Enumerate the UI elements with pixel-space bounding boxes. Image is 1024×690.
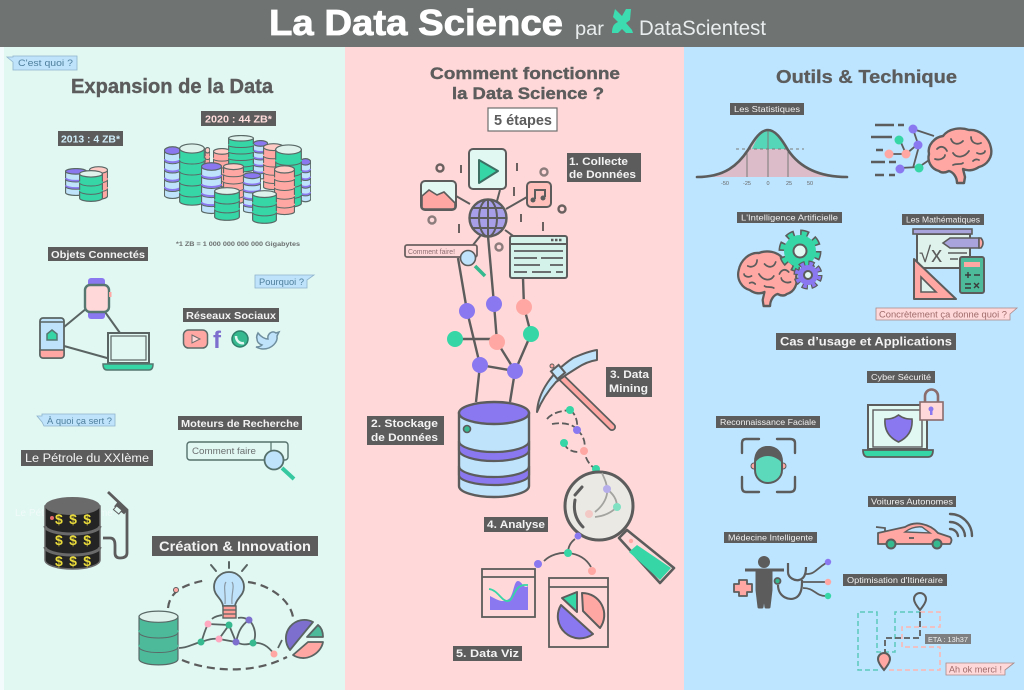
icon: magnifying glass <box>565 472 674 583</box>
chart: area chart <box>482 569 535 617</box>
label: Le Pétrole du XXIème <box>21 450 153 466</box>
bubble: Pourquoi: Pourquoi ? <box>259 277 304 288</box>
header band <box>0 0 1024 47</box>
byline: par: par <box>575 19 605 40</box>
label: Reconnaissance Faciale: Reconnaissance Faciale <box>720 417 816 427</box>
panel: Comment fonctionne la Data Science <box>367 64 674 661</box>
icon: search box: Comment faire <box>192 446 256 457</box>
label: Moteurs de Recherche: Moteurs de Recherche <box>181 418 299 430</box>
panel: Expansion de la Data <box>7 56 323 669</box>
icon: pickaxe <box>537 350 612 427</box>
icon: oil barrel: $ $ $ <box>55 553 91 569</box>
step 5 label: 5. Data Viz <box>456 648 520 660</box>
icon: social networks <box>184 327 279 354</box>
brand name: DataScientest <box>639 17 766 40</box>
heading: Expansion de la Data: Expansion de la Data <box>71 76 274 98</box>
label: Voitures Autonomes: Voitures Autonomes <box>871 496 953 506</box>
label: Création & Innovation <box>152 536 318 556</box>
heading: Comment fonctionne la Data Science: la Data Science ? <box>452 84 604 103</box>
label: 2020 <box>201 111 276 126</box>
diagram: mining scatter <box>547 406 600 473</box>
title: La Data Science <box>269 2 563 43</box>
icon: maths board <box>913 229 984 299</box>
bubble: Ah ok merci: Ah ok merci ! <box>949 664 1002 676</box>
step 3 label: 3. Data <box>610 369 650 381</box>
step 1 label: 1. Collecte <box>569 156 628 168</box>
heading: Comment fonctionne la Data Science: Comment fonctionne <box>430 64 620 83</box>
label: Le Pétrole du XXIème: Le Pétrole du XXIème <box>25 453 149 465</box>
icon: data sources network <box>405 149 567 365</box>
chart: large data stack 2020 <box>164 136 311 223</box>
step 3 label: Mining <box>609 383 648 395</box>
icon: oil barrel: $ $ $ <box>55 511 91 527</box>
icon: brain with network <box>871 124 991 183</box>
step 2 label <box>367 416 444 445</box>
icon: brain with gears <box>738 234 819 306</box>
heading: Comment fonctionne la Data Science <box>430 64 620 103</box>
bubble: Pourquoi <box>255 275 314 288</box>
icon: facial recognition <box>742 439 795 492</box>
bubble: À quoi ça sert: À quoi ça sert ? <box>47 416 112 426</box>
label: Les Mathématiques: Les Mathématiques <box>906 214 980 224</box>
step 3 label <box>606 367 652 397</box>
label: Création & Innovation: Création & Innovation <box>159 539 311 554</box>
bubble: Concrètement ça donne quoi: Concrètement ça donne quoi ? <box>879 310 1007 320</box>
icon: autonomous car <box>876 514 972 548</box>
bubble: À quoi ça sert <box>37 414 115 426</box>
icon: connected devices <box>40 278 153 370</box>
step 1 label <box>567 153 641 182</box>
label: Objets Connectés: Objets Connectés <box>51 249 145 261</box>
icon: oil barrel <box>45 492 127 569</box>
label: Cyber Sécurité <box>867 371 935 383</box>
icon: search box <box>187 442 294 479</box>
label: L'Intelligence Artificielle: L'Intelligence Artificielle <box>741 212 838 222</box>
ETA tag: ETA : 13h37 <box>928 635 968 644</box>
map: route optimisation <box>858 593 971 670</box>
label: Cyber Sécurité: Cyber Sécurité <box>871 372 931 382</box>
icon: secure laptop <box>863 390 943 457</box>
step 1 label: de Données <box>569 169 636 181</box>
label: Les Statistiques: Les Statistiques <box>734 104 800 114</box>
label: 2013: 2013 : 4 ZB* <box>61 134 121 146</box>
chart: bell curve: 25 <box>786 181 792 187</box>
chart: bell curve: 0 <box>766 181 770 187</box>
step 2 label: 2. Stockage <box>371 418 438 430</box>
chart: pie chart <box>549 578 608 647</box>
label: Optimisation d'Itinéraire: Optimisation d'Itinéraire <box>847 575 943 585</box>
heading: Outils & Technique: Outils & Technique <box>776 66 957 87</box>
step 4 label: 4. Analyse <box>487 519 545 531</box>
diagram: data flow nodes <box>447 296 539 402</box>
step 5 label <box>453 646 522 661</box>
diagram: analysis links <box>534 532 596 575</box>
icon: storage database <box>459 402 529 497</box>
icon: maths board: √x <box>919 242 942 267</box>
label: Médecine Intelligente: Médecine Intelligente <box>728 532 813 542</box>
faint ghost text: Le Pétrole du XXIème <box>15 508 113 519</box>
icon: smart medicine <box>734 556 831 607</box>
label: Réseaux Sociaux: Réseaux Sociaux <box>186 310 276 322</box>
footnote: *1 ZB = 1 000 000 000 000 Gigabytes <box>176 241 301 248</box>
label: Les Statistiques <box>730 103 804 115</box>
chart: small data stack 2013 <box>66 167 108 201</box>
label: 5 étapes <box>488 108 557 131</box>
bubble: C'est quoi: C'est quoi ? <box>18 58 73 69</box>
icon: oil barrel: $ $ $ <box>55 532 91 548</box>
chart: bell curve: -50 <box>721 181 729 187</box>
chart: bell curve <box>697 130 847 187</box>
panel: Outils et Technique <box>697 66 1017 676</box>
step 4 label <box>484 517 548 532</box>
chart: bell curve: -25 <box>743 181 751 187</box>
step 2 label: de Données <box>371 432 438 444</box>
label: Cas d'usage et Applications: Cas d’usage et Applications <box>780 334 952 348</box>
icon: social networks: f <box>213 327 222 354</box>
chart: bell curve: 50 <box>807 181 813 187</box>
bubble: C'est quoi <box>7 56 77 70</box>
icon: data sources network: Comment faire! <box>408 247 455 256</box>
label: 5 étapes: 5 étapes <box>494 113 552 129</box>
label: 2020: 2020 : 44 ZB* <box>205 114 273 126</box>
diagram: creation and innovation <box>139 562 323 669</box>
icon: DataScientest logo <box>612 9 633 33</box>
